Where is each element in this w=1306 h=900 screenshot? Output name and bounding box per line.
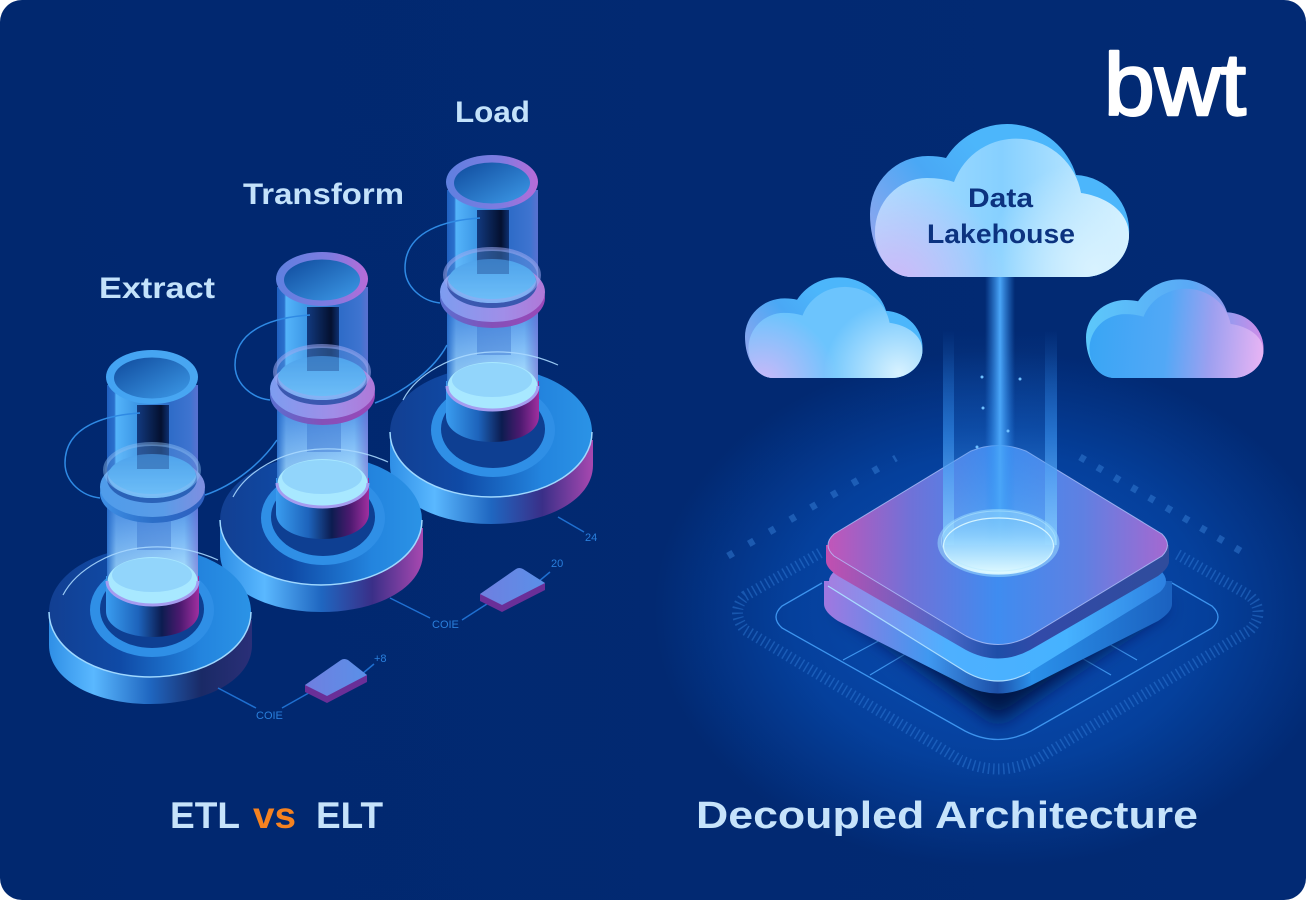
floor diagram under platform bbox=[728, 457, 1258, 769]
connector wire: extract to transform bbox=[205, 440, 277, 495]
chip: upper: 20 bbox=[551, 558, 563, 570]
chip: upper: 24 bbox=[585, 532, 597, 544]
chip: upper bbox=[390, 517, 597, 631]
platform: upper plate bbox=[826, 446, 1169, 658]
heading: etl vs elt: vs bbox=[253, 795, 296, 836]
chip: lower: +8 bbox=[374, 653, 387, 665]
cloud label: Data bbox=[968, 183, 1034, 213]
label: transform: Transform bbox=[243, 178, 404, 211]
cloud label: Lakehouse bbox=[927, 219, 1075, 249]
pillar: transform bbox=[220, 252, 423, 612]
platform: lower plate bbox=[824, 485, 1172, 694]
heading: etl vs elt: ELT bbox=[316, 795, 383, 836]
pillar: load bbox=[390, 155, 593, 524]
cloud: left bbox=[745, 277, 923, 378]
heading: etl vs elt: ETL bbox=[170, 795, 240, 836]
platform shadow bbox=[836, 560, 1168, 722]
cloud: right bbox=[1086, 279, 1264, 378]
cloud: data lakehouse bbox=[870, 124, 1129, 277]
logo: bwt bbox=[1104, 35, 1246, 134]
heading: etl vs elt bbox=[170, 795, 383, 836]
chip: lower bbox=[218, 653, 387, 722]
light beam from platform to lakehouse bbox=[938, 277, 1060, 577]
connector wire: transform to load bbox=[375, 345, 447, 403]
heading: decoupled architecture: Decoupled Architecture bbox=[696, 795, 1198, 837]
label: extract: Extract bbox=[99, 272, 215, 305]
chip: lower: COIE bbox=[256, 710, 283, 722]
chip: upper: COIE bbox=[432, 619, 459, 631]
label: load: Load bbox=[455, 96, 530, 129]
pillar: extract bbox=[49, 350, 252, 704]
